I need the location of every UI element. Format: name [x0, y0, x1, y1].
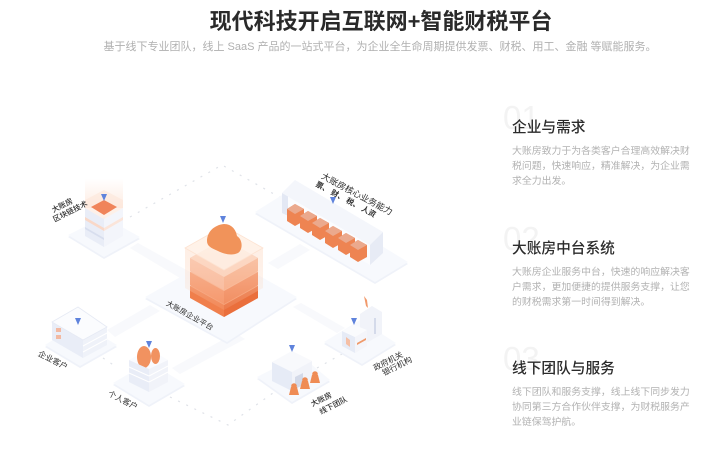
icon: team members [289, 371, 320, 395]
label: blockchain: 区块链技术 [51, 198, 89, 224]
label: government: 政府机关 [371, 349, 405, 373]
number 03: 03 [503, 340, 540, 377]
number 02: 02 [503, 220, 540, 257]
icon: cloud [207, 224, 242, 254]
body: 协同第三方合作伙伴支撑，为财税服务产 [512, 402, 690, 413]
label: individual: 个人客户 [106, 388, 140, 412]
section 1 [503, 99, 690, 187]
enterprise customer node [36, 307, 117, 372]
central server stack [185, 224, 263, 317]
offline team node [257, 351, 349, 416]
label: team: 线下团队 [317, 394, 349, 416]
government node [324, 296, 414, 378]
label: core business: 票、 财、 税、 人资 [314, 179, 378, 219]
title: 现代科技开启互联网+智能财税平台 [210, 9, 552, 34]
location markers [75, 194, 357, 352]
section 2 [503, 220, 690, 308]
body: 户需求，更加便捷的提供服务支撑，让您 [512, 282, 690, 293]
body: 求全力出发。 [512, 176, 571, 187]
heading: 企业与需求 [512, 120, 585, 136]
label: enterprise: 企业客户 [36, 348, 70, 372]
body: 的财税需求第一时间得到解决。 [512, 297, 650, 308]
label: government: 银行机构 [380, 354, 414, 378]
dotted network outline [103, 165, 342, 425]
label: team [309, 389, 349, 416]
body [512, 146, 690, 187]
body: 线下团队和服务支撑，线上线下同步发力 [512, 386, 690, 398]
body [512, 266, 690, 308]
label: blockchain: 大账房 [50, 195, 74, 215]
icon: people [137, 346, 160, 368]
body: 大账房企业服务中台，快速的响应解决客 [512, 266, 690, 278]
section 3 [503, 340, 690, 428]
subtitle: 基于线下专业团队，线上 SaaS 产品的一站式平台，为企业全生命周期提供发票、财税、用工、金融 等赋能服务。 [103, 41, 657, 53]
body: 大账房致力于为各类客户合理高效解决财 [512, 146, 690, 156]
body [512, 386, 690, 428]
heading: 线下团队与服务 [512, 360, 615, 376]
label: government [371, 349, 414, 378]
heading: 大账房中台系统 [512, 240, 615, 256]
core business node [255, 170, 408, 284]
label: team: 大账房 [309, 389, 333, 409]
body: 业链保驾护航。 [512, 417, 581, 428]
glass cube [185, 226, 263, 310]
connector bands [107, 243, 345, 374]
bricks [287, 204, 367, 262]
number 01: 01 [503, 99, 540, 136]
icon: flag [364, 296, 368, 308]
body: 税问题，快速响应，精准解决，为企业需 [512, 161, 690, 172]
central platform [145, 224, 297, 344]
individual customer node [106, 346, 185, 412]
label: core business: 大账房核心业务能力 [320, 170, 395, 217]
blockchain node [50, 178, 140, 259]
label: platform: 大账房企业平台 [165, 298, 215, 332]
